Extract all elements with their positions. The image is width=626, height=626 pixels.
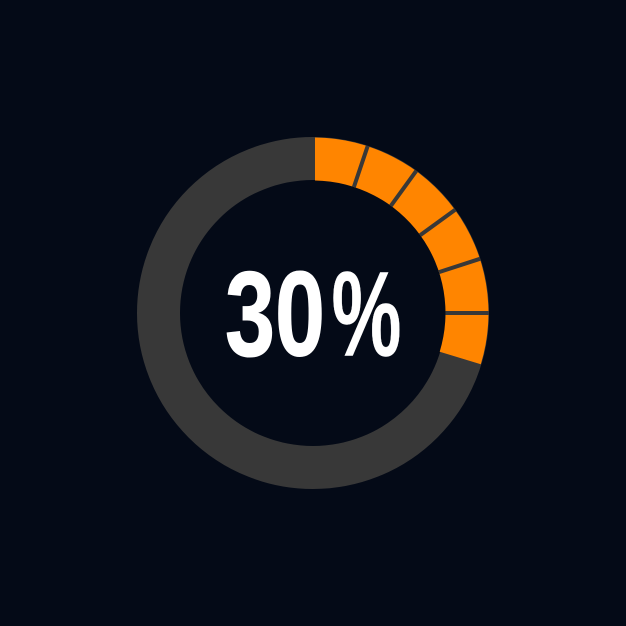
gauge track ring xyxy=(158,158,468,468)
orange progress arc: 30 percent xyxy=(315,138,488,364)
percentage label: % xyxy=(332,246,402,382)
segment dividers xyxy=(354,146,489,313)
percentage label: 30 xyxy=(225,246,325,382)
